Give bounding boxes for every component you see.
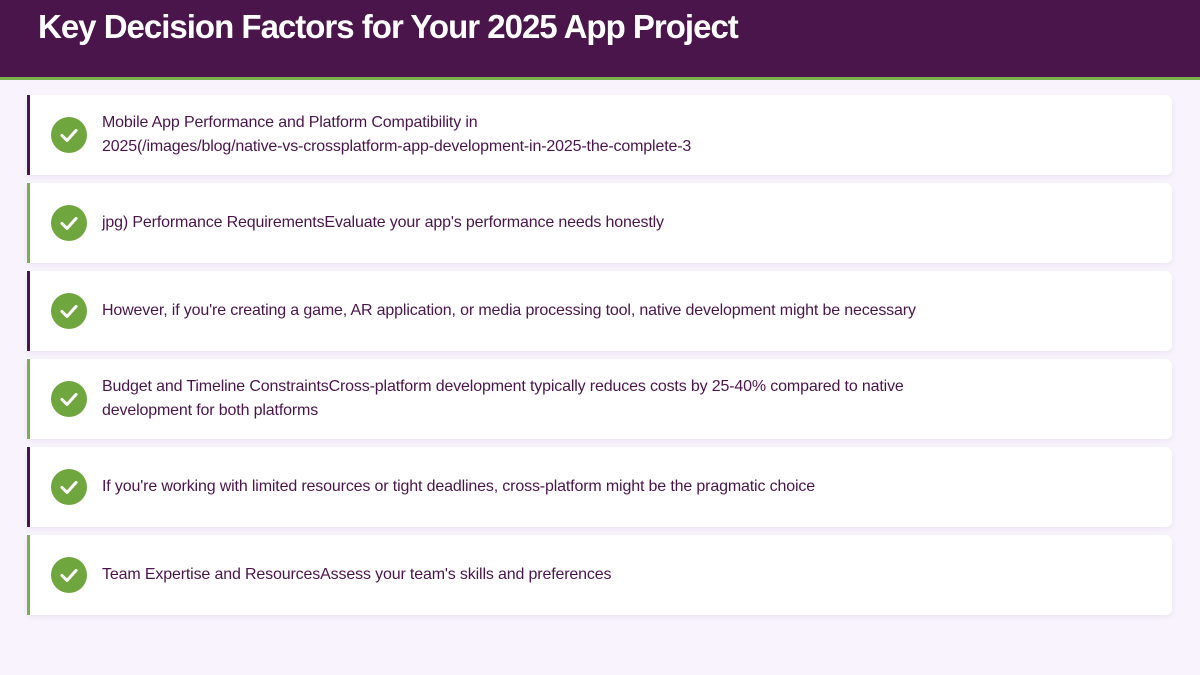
header bbox=[0, 0, 1200, 80]
title: Key Decision Factors for Your 2025 App Project bbox=[38, 8, 738, 45]
text: However, if you're creating a game, AR application, or media processing tool, native development might be necessary bbox=[102, 302, 916, 319]
text: Budget and Timeline ConstraintsCross-platform development typically reduces costs by 25-40% compared to native development for both platforms bbox=[102, 378, 904, 419]
text: Team Expertise and ResourcesAssess your team's skills and preferences bbox=[102, 566, 611, 583]
icon: check bbox=[51, 381, 87, 417]
text: jpg) Performance RequirementsEvaluate your app's performance needs honestly bbox=[102, 214, 664, 231]
card 3 bbox=[27, 271, 1172, 351]
icon: check bbox=[51, 469, 87, 505]
icon: check bbox=[51, 205, 87, 241]
text: Mobile App Performance and Platform Compatibility in bbox=[102, 114, 478, 131]
text: If you're working with limited resources or tight deadlines, cross-platform might be the pragmatic choice bbox=[102, 478, 815, 495]
icon: check bbox=[51, 117, 87, 153]
card 2 bbox=[27, 183, 1172, 263]
card 5 bbox=[27, 447, 1172, 527]
card 4 bbox=[27, 359, 1172, 439]
card 1 bbox=[27, 95, 1172, 175]
icon: check bbox=[51, 557, 87, 593]
card 6 bbox=[27, 535, 1172, 615]
icon: check bbox=[51, 293, 87, 329]
text bbox=[102, 114, 691, 155]
text: 2025(/images/blog/native-vs-crossplatform-app-development-in-2025-the-complete-3 bbox=[102, 138, 691, 155]
